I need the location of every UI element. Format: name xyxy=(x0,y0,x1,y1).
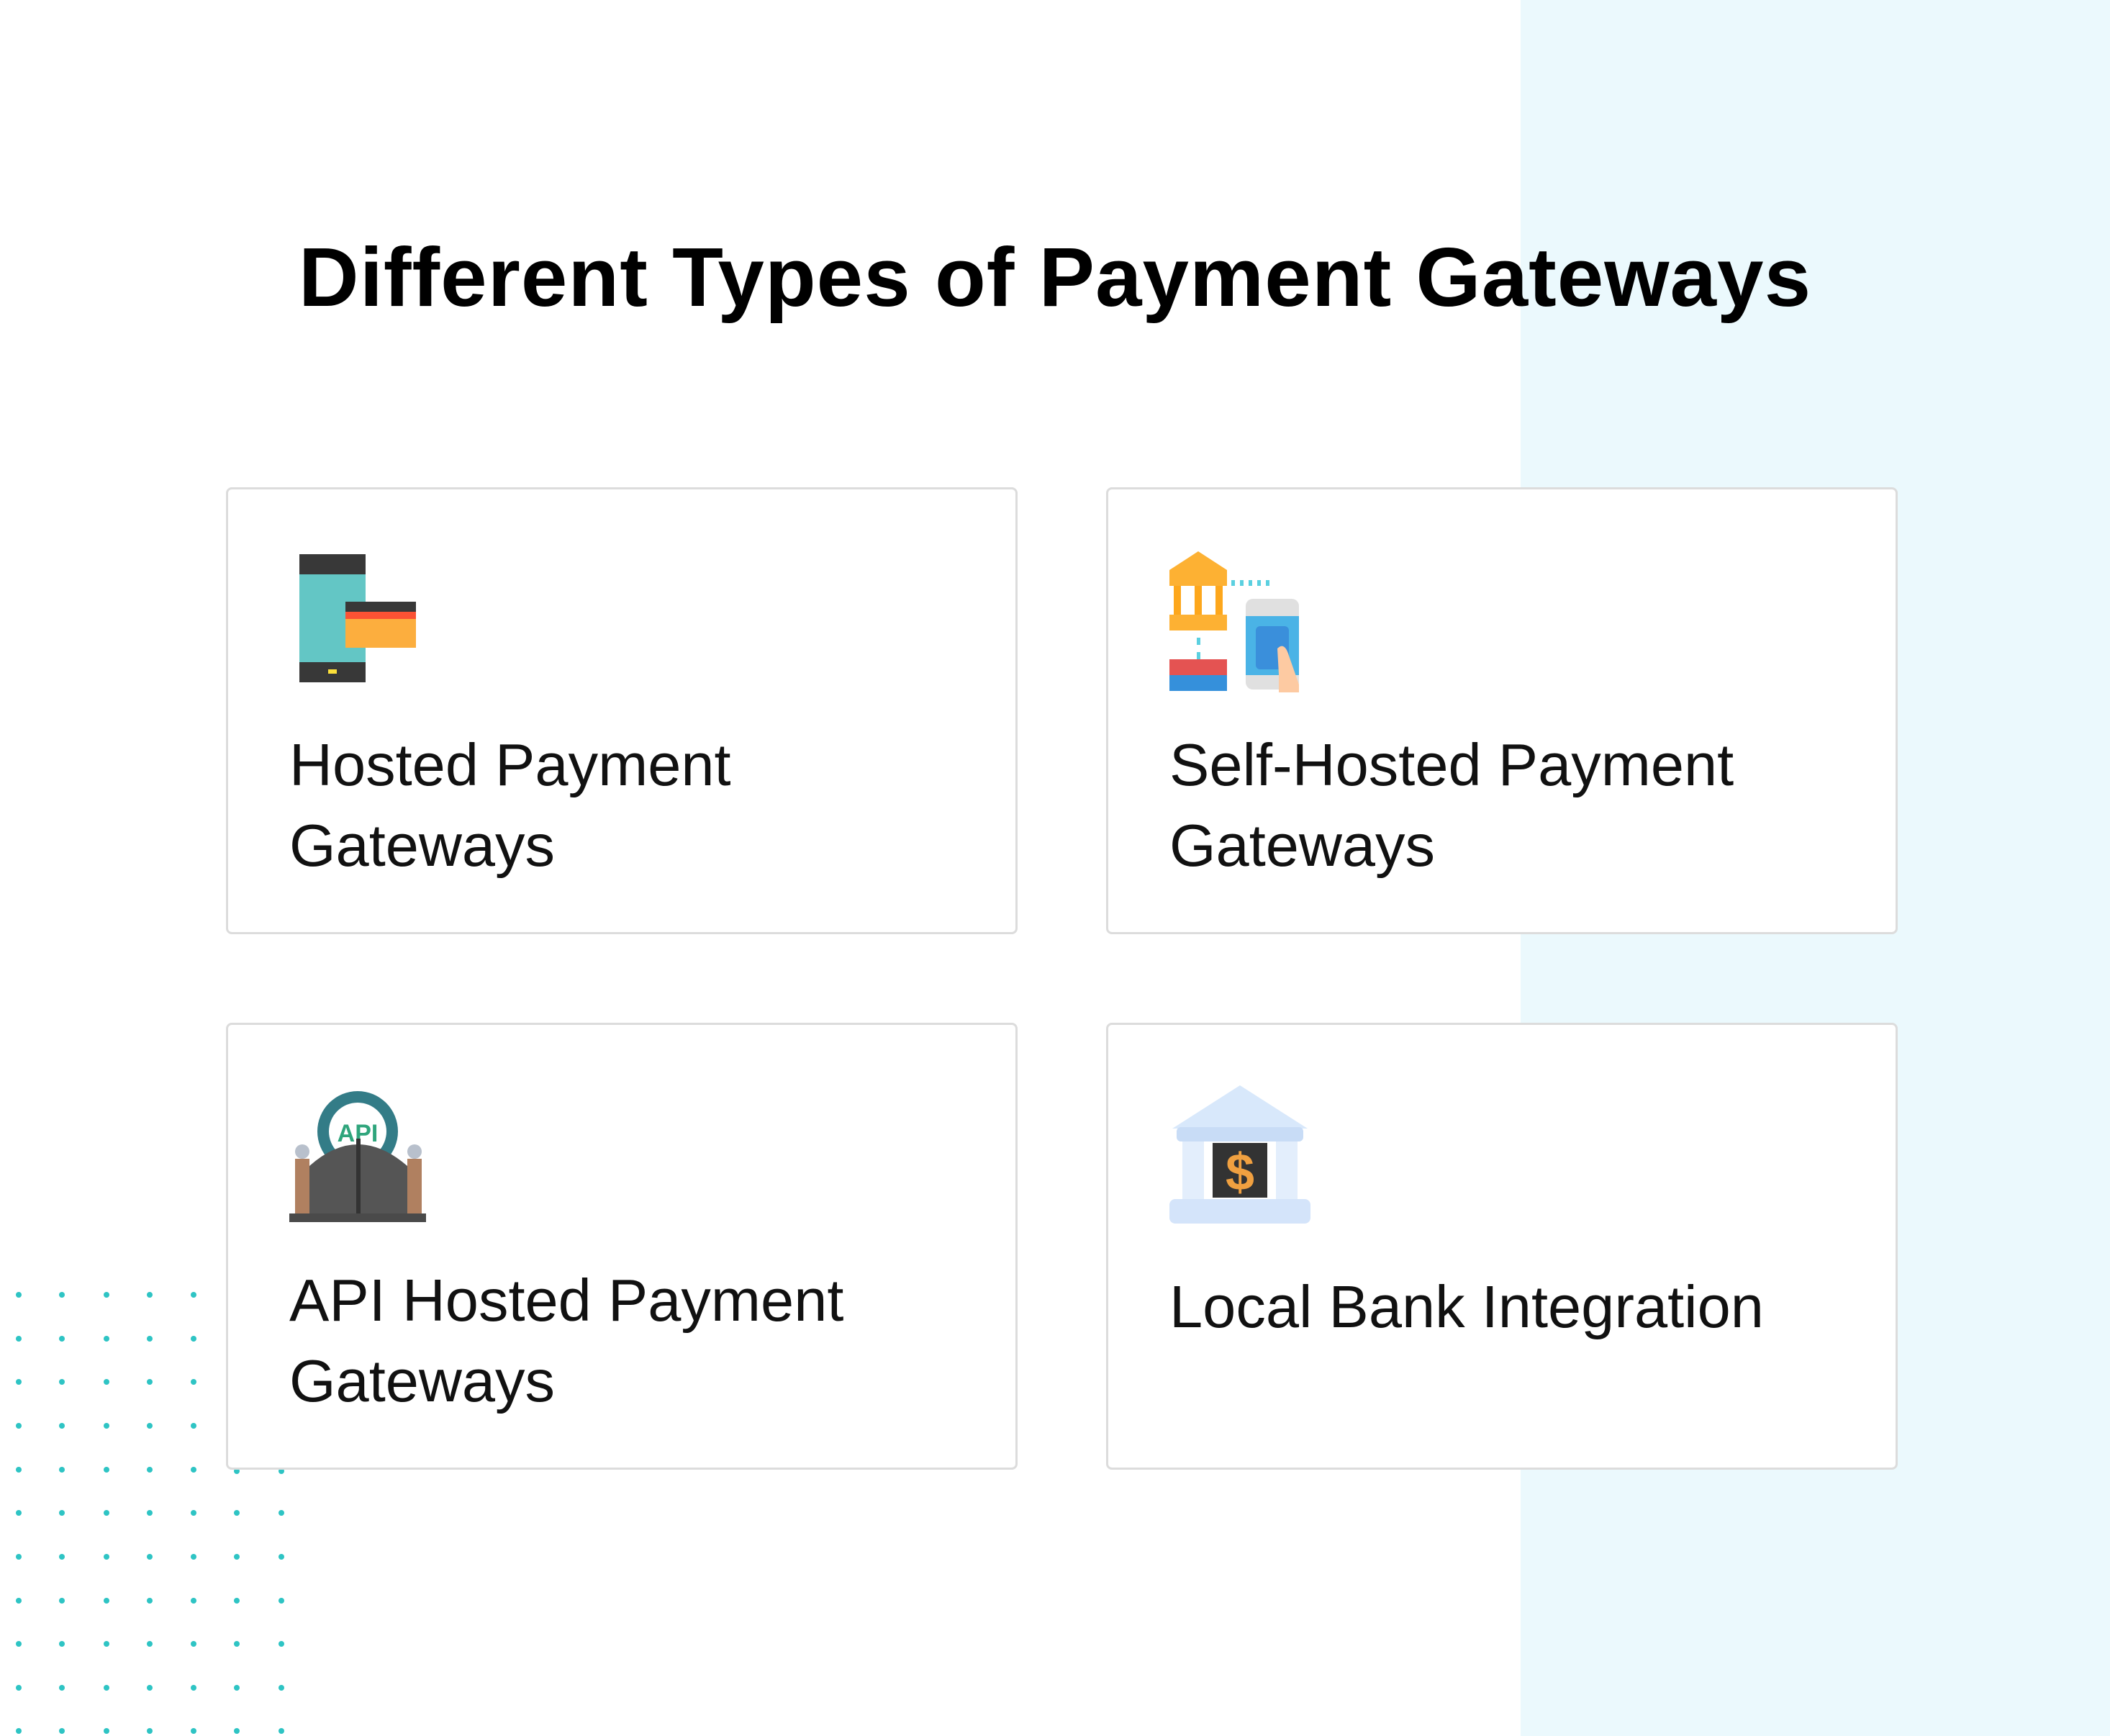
icon: phone with card xyxy=(299,554,416,682)
panel: API hosted xyxy=(226,1023,1018,1470)
label: Self-Hosted Payment xyxy=(1169,731,1734,798)
label xyxy=(1169,731,1734,879)
icon: API gate xyxy=(289,1091,426,1222)
label: Hosted Payment xyxy=(289,731,731,798)
icon: bank dollar: $ xyxy=(1226,1144,1254,1201)
icon: bank shop phone xyxy=(1169,551,1299,692)
label: Gateways xyxy=(289,1347,555,1414)
panel: local bank xyxy=(1106,1023,1898,1470)
label xyxy=(289,731,731,879)
panel: self-hosted xyxy=(1106,487,1898,934)
decorative dots xyxy=(16,1292,284,1734)
icon: API gate: API xyxy=(338,1120,378,1147)
label: API Hosted Payment xyxy=(289,1267,843,1334)
label: Local Bank Integration xyxy=(1169,1273,1764,1340)
label xyxy=(289,1267,843,1414)
label: Gateways xyxy=(289,812,555,879)
panel: hosted xyxy=(226,487,1018,934)
label: Gateways xyxy=(1169,812,1435,879)
icon: bank dollar xyxy=(1169,1085,1310,1224)
title: Different Types of Payment Gateways xyxy=(299,230,1811,324)
